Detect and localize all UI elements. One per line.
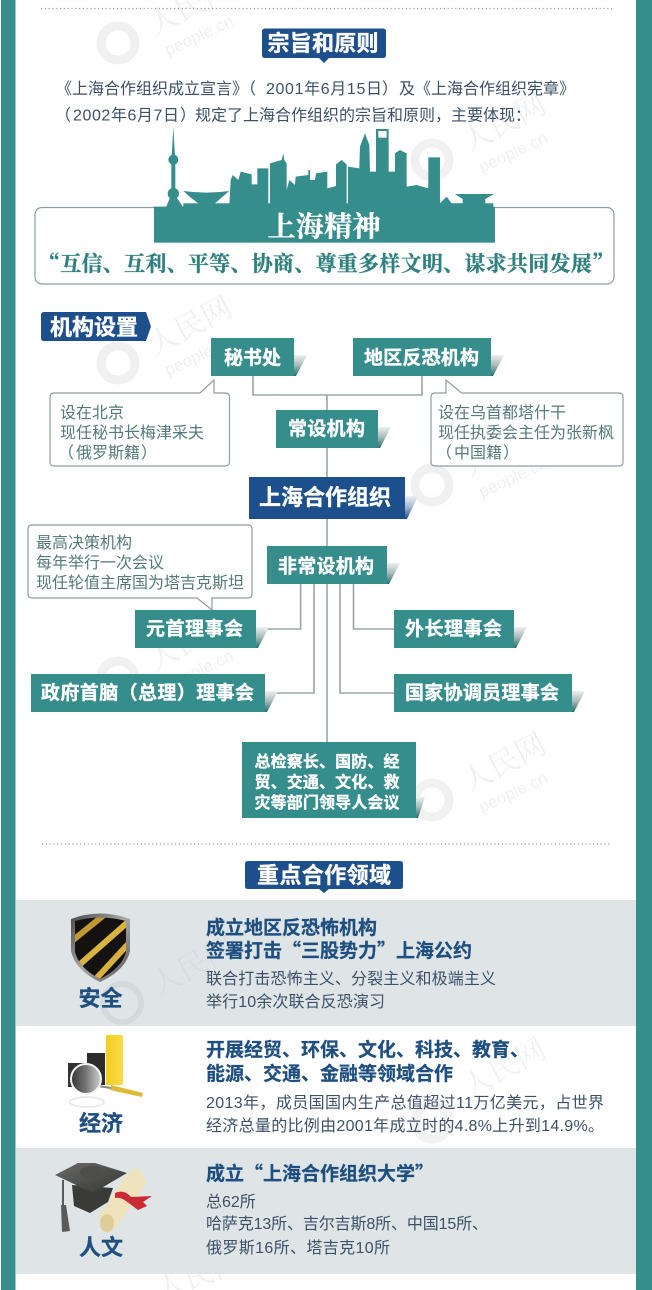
lower dotted divider — [42, 843, 610, 845]
icon: graduation cap and scroll — [55, 1163, 152, 1232]
heading: 成立“上海合作组织大学” — [206, 1159, 434, 1186]
callout: 秘书处: （ — [58, 444, 74, 462]
panel: 经济: 能源、交通、金融等领域合作 — [206, 1059, 453, 1086]
intro text: （ — [55, 106, 71, 124]
body lines: 联合打击恐怖主义、分裂主义和极端主义 — [206, 970, 496, 988]
watermark right lower — [415, 728, 552, 817]
callout: 地区反恐机构: ） — [503, 444, 519, 462]
box: 部门领导人会议: 总检察长、国防、经 — [254, 752, 400, 771]
intro text: ） — [382, 80, 398, 98]
label: 安全: 安全 — [78, 981, 123, 1013]
panel: 安全: 举行10余次联合反恐演习 — [206, 992, 385, 1011]
box: 部门领导人会议 — [242, 742, 425, 818]
box: 秘书处 — [211, 338, 307, 376]
skyline illustration — [154, 127, 495, 243]
box: 部门领导人会议: 灾等部门领导人会议 — [254, 793, 400, 812]
box: 上海合作组织: 上海合作组织 — [259, 485, 391, 510]
watermark right middle: people.cn — [476, 453, 551, 502]
watermark right upper: people.cn — [476, 128, 551, 177]
heading: 宗旨和原则: 宗旨和原则 — [268, 31, 378, 56]
上海精神 title: 上海精神 — [268, 205, 380, 245]
watermark right middle: 人民网 — [457, 413, 552, 484]
watermark right lower: people.cn — [476, 768, 551, 817]
intro text: ） — [180, 106, 196, 124]
callout: 秘书处: 设在北京 — [60, 404, 124, 422]
box: 非常设机构 — [267, 546, 400, 584]
callout: 地区反恐机构: 现任执委会主任为张新枫 — [438, 424, 614, 442]
panel: 经济 — [68, 1033, 604, 1139]
intro text: 及《上海合作组织宪章》 — [399, 80, 575, 98]
right teal border — [636, 0, 652, 1290]
label: 经济: 经济 — [79, 1106, 123, 1138]
watermark top left: people.cn — [162, 11, 237, 60]
watermark left lower: 人民网 — [143, 606, 238, 677]
org chart connector lines — [253, 376, 422, 742]
watermark in white band — [415, 1033, 552, 1139]
callout: 地区反恐机构 — [431, 380, 623, 466]
icon: shield — [71, 914, 130, 982]
heading: 机构设置: 机构设置 — [50, 315, 138, 340]
callout: 秘书处 — [50, 380, 230, 466]
callout: 地区反恐机构: （ — [436, 444, 452, 462]
watermark left middle — [101, 291, 238, 380]
box: 元首理事会 — [135, 610, 269, 648]
panel: 安全: 签署打击“三股势力”上海公约 — [206, 936, 472, 963]
box: 部门领导人会议: 贸、交通、文化、救 — [254, 772, 400, 792]
callout: 地区反恐机构: 中国籍 — [454, 444, 502, 462]
heading lines: 成立地区反恐怖机构 — [206, 913, 377, 940]
callout: 元首理事会: 现任轮值主席国为塔吉克斯坦 — [36, 574, 244, 592]
left teal border — [1, 0, 16, 1290]
panel: 安全 — [16, 900, 636, 1026]
heading: 宗旨和原则 — [262, 28, 386, 63]
box: 外长理事会 — [394, 610, 527, 648]
panel: 人文: 俄罗斯16所、塔吉克10所 — [206, 1239, 390, 1257]
heading: 机构设置 — [41, 312, 151, 341]
intro text — [55, 80, 575, 124]
box: 地区反恐机构 — [353, 338, 504, 376]
box: 秘书处: 秘书处 — [224, 347, 281, 369]
icon: magnifier and bars — [68, 1035, 143, 1107]
box: 政府首脑（总理）理事会: 政府首脑（总理）理事会 — [41, 681, 254, 704]
box: 常设机构: 常设机构 — [288, 418, 365, 440]
box: 上海合作组织 — [249, 477, 418, 519]
callout: 秘书处: 现任秘书长梅津采夫 — [60, 424, 204, 442]
callout: 秘书处: ） — [141, 444, 157, 462]
watermark left lower — [101, 606, 238, 695]
watermark right upper — [415, 88, 552, 177]
label: 人文: 人文 — [79, 1230, 123, 1262]
watermark in band: 人民网 — [146, 931, 241, 1002]
body lines: 总62所 — [206, 1193, 256, 1211]
intro text: 2001年6月15日 — [266, 80, 382, 98]
intro text: 2002年6月7日 — [73, 106, 179, 124]
watermark in white band: 人民网 — [457, 1033, 552, 1104]
watermark left middle: people.cn — [162, 331, 237, 380]
watermark in band — [103, 931, 241, 1022]
panel: 人文: 哈萨克13所、吉尔吉斯8所、中国15所、 — [206, 1215, 488, 1233]
box: 元首理事会: 元首理事会 — [146, 617, 243, 640]
panel: 经济: 经济总量的比例由2001年成立时的4.8%上升到14.9%。 — [206, 1117, 604, 1135]
callout: 元首理事会: 最高决策机构 — [36, 534, 132, 552]
box: 国家协调员理事会 — [394, 674, 585, 712]
panel: 人文 — [16, 1148, 636, 1274]
box: 地区反恐机构: 地区反恐机构 — [364, 347, 479, 369]
heading lines: 开展经贸、环保、文化、科技、教育、 — [206, 1035, 529, 1062]
box: 外长理事会: 外长理事会 — [405, 618, 502, 640]
box: 非常设机构: 非常设机构 — [278, 556, 374, 578]
watermark right upper: 人民网 — [457, 88, 552, 159]
watermark left middle: 人民网 — [143, 291, 238, 362]
box: 政府首脑（总理）理事会 — [31, 674, 278, 712]
watermark top left — [101, 0, 238, 60]
outlined quote box — [35, 208, 614, 284]
watermark left lower: people.cn — [162, 646, 237, 695]
intro text: 规定了上海合作组织的宗旨和原则，主要体现： — [195, 106, 531, 124]
watermark right lower: 人民网 — [457, 728, 552, 799]
box: 常设机构 — [276, 410, 391, 448]
heading: 重点合作领域: 重点合作领域 — [257, 863, 391, 888]
callout: 地区反恐机构: 设在乌首都塔什干 — [438, 404, 566, 422]
callout: 元首理事会: 每年举行一次会议 — [36, 554, 164, 572]
box: 国家协调员理事会: 国家协调员理事会 — [405, 681, 559, 704]
callout: 秘书处: 俄罗斯籍 — [76, 444, 140, 462]
quote line: “互信、互利、平等、协商、尊重多样文明、谋求共同发展” — [39, 248, 613, 278]
body lines: 2013年，成员国国内生产总值超过11万亿美元，占世界 — [206, 1094, 604, 1112]
watermark right middle — [415, 413, 552, 502]
top dotted divider — [41, 8, 612, 10]
intro text: 《上海合作组织成立宣言》（ — [56, 80, 256, 98]
panel: 上海精神 — [35, 127, 614, 284]
heading: 重点合作领域 — [245, 861, 403, 893]
callout: 元首理事会 — [28, 525, 252, 610]
